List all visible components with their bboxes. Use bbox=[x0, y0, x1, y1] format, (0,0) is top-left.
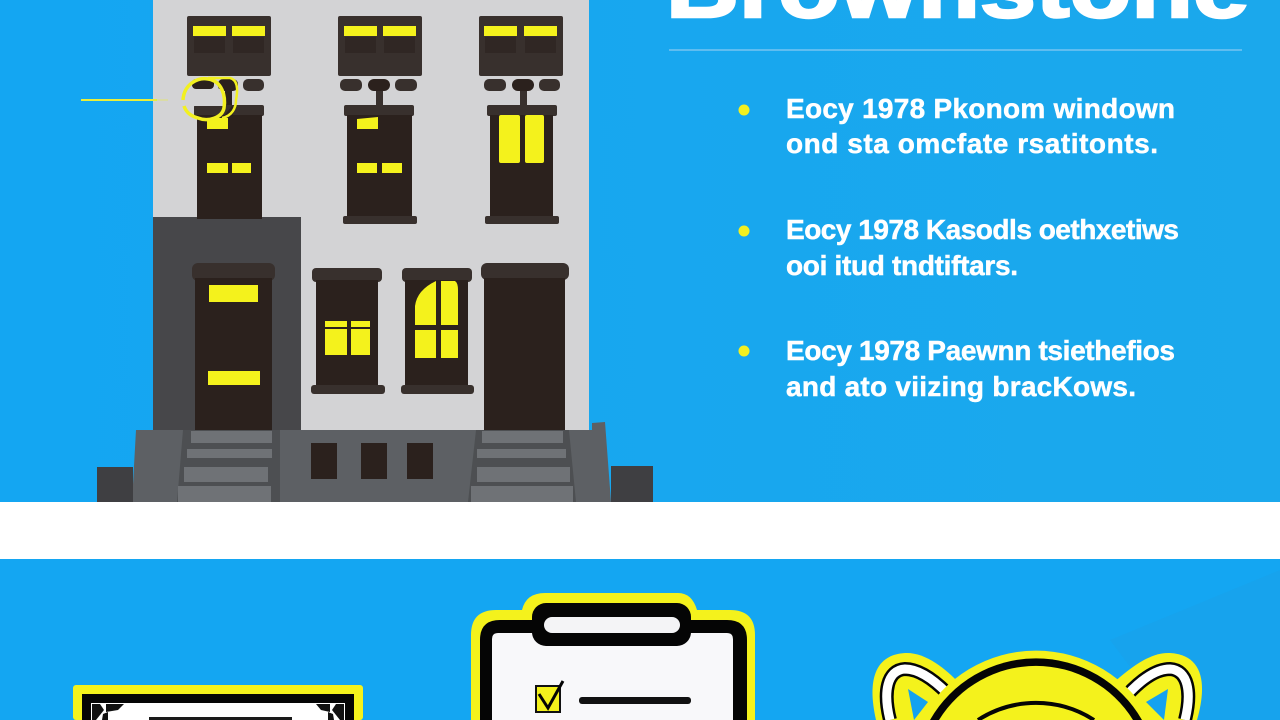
bullet 3: and ato viizing bracKows. bbox=[786, 371, 1136, 402]
annotation callout: leader line and scribbled circle bbox=[81, 78, 237, 120]
basement windows bbox=[311, 443, 433, 479]
bullet 1 bbox=[738, 93, 1175, 159]
panel: lower blue background bbox=[0, 559, 1280, 720]
middle window 1 bbox=[194, 105, 264, 219]
brackets column 2 bbox=[340, 79, 417, 106]
upper window 3 bbox=[479, 16, 563, 76]
upper window 1 bbox=[187, 16, 271, 76]
right door bbox=[481, 263, 569, 431]
brackets column 3 bbox=[484, 79, 560, 106]
middle window 2 bbox=[343, 105, 417, 224]
certificate corner ornaments bbox=[92, 704, 344, 720]
side block left bbox=[97, 467, 133, 502]
lower window left bbox=[311, 268, 385, 394]
panel: white divider band bbox=[0, 502, 1280, 559]
left door bbox=[192, 263, 275, 431]
brackets column 1 bbox=[192, 79, 264, 107]
stoop wing bbox=[153, 217, 301, 431]
badge body bbox=[921, 651, 1151, 720]
right stoop steps bbox=[468, 430, 576, 502]
bullet 3 bbox=[738, 335, 1175, 402]
right ear bbox=[1112, 653, 1202, 720]
building facade bbox=[153, 0, 589, 432]
badge inner arc bbox=[978, 703, 1094, 720]
upper window 2 bbox=[338, 16, 422, 76]
bullet 2: Eocy 1978 Kasodls oethxetiws bbox=[786, 214, 1179, 245]
bullet 2: ooi itud tndtiftars. bbox=[786, 250, 1018, 281]
title rule bbox=[669, 49, 1242, 51]
left ear bbox=[872, 653, 960, 720]
checklist line bbox=[579, 697, 691, 704]
bullet 2 bbox=[738, 214, 1179, 281]
side block right bbox=[611, 466, 653, 502]
middle window 3 bbox=[485, 105, 559, 224]
illustration: brownstone building bbox=[81, 0, 653, 502]
plinth base bbox=[132, 422, 611, 502]
bullet 1: Eocy 1978 Pkonom windown bbox=[786, 93, 1175, 124]
bullet 1: ond sta omcfate rsatitonts. bbox=[786, 128, 1158, 159]
bullet 3: Eocy 1978 Paewnn tsiethefios bbox=[786, 335, 1175, 366]
icon: certificate bbox=[73, 685, 363, 720]
bullet list bbox=[738, 93, 1179, 402]
lower window right bbox=[401, 268, 474, 394]
icon: clipboard bbox=[471, 593, 755, 720]
icon: round yellow badge with ears bbox=[872, 651, 1202, 720]
left stoop steps bbox=[177, 430, 280, 502]
panel: upper blue background bbox=[0, 0, 1280, 502]
checkbox with tick bbox=[536, 681, 563, 712]
